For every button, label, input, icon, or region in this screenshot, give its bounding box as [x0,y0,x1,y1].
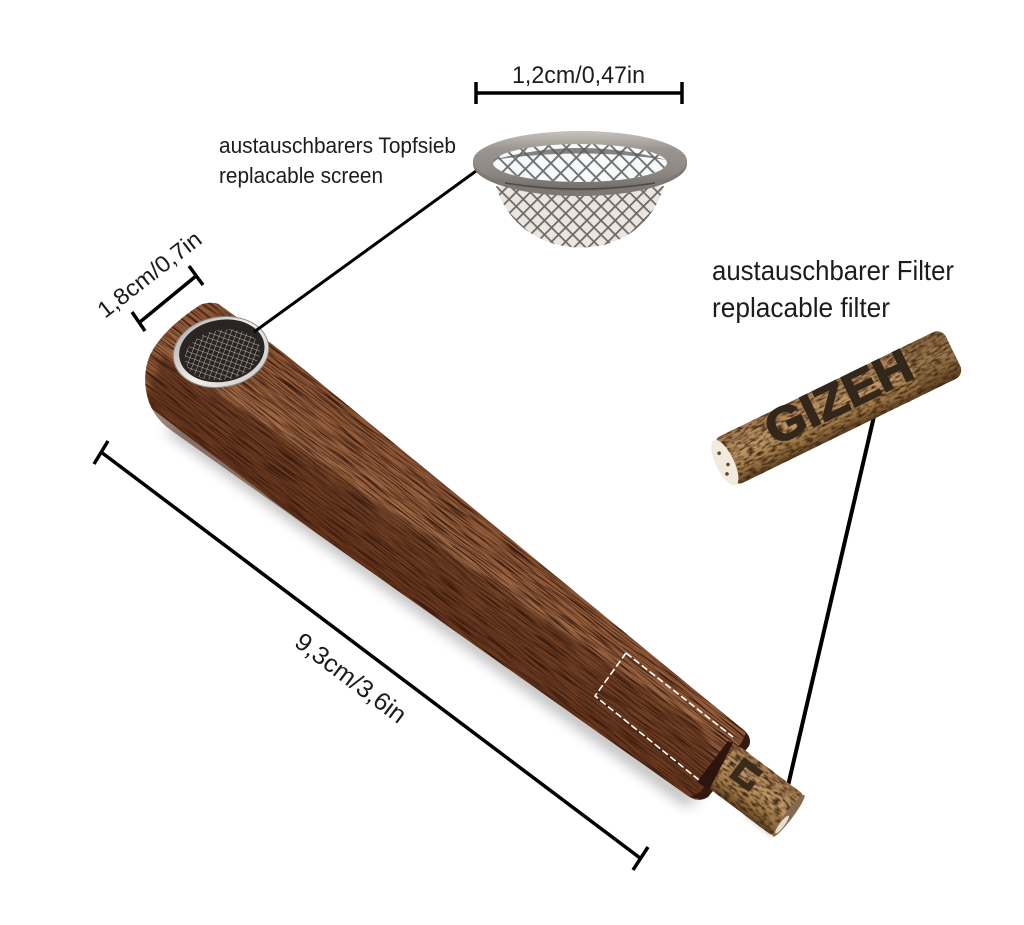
label: 9,3cm/3,6in: 9,3cm/3,6in [289,627,412,729]
label: replaceable screen: replacable screen [219,163,383,188]
GIZEH print: GIZEH [756,338,921,455]
label: replaceable filter: austauschbarer Filter [712,255,954,286]
dashed engraving area [595,653,733,780]
label: 1,8cm/0,7in: 1,8cm/0,7in [92,225,207,323]
label: replaceable screen [219,133,456,188]
dimension: bowl width [132,266,203,331]
label: replaceable filter: replacable filter [712,292,890,323]
filter stub in pipe end [697,741,808,839]
label: 1,2cm/0,47in: 1,2cm/0,47in [512,62,645,89]
pipe shadow [165,425,700,805]
infographic canvas [92,66,962,871]
pipe body [145,302,750,800]
leader line: screen [254,166,483,332]
label: replaceable screen: austauschbarers Topfsieb [219,133,456,158]
dimension: screen width [476,82,682,104]
leader line: filter [787,412,875,790]
screen illustration [473,131,687,248]
dimension: pipe length [94,441,648,870]
filter end [706,436,744,489]
filter illustration [711,331,962,486]
label: replaceable filter [712,255,954,323]
bowl with metal ring and mesh [168,309,274,395]
